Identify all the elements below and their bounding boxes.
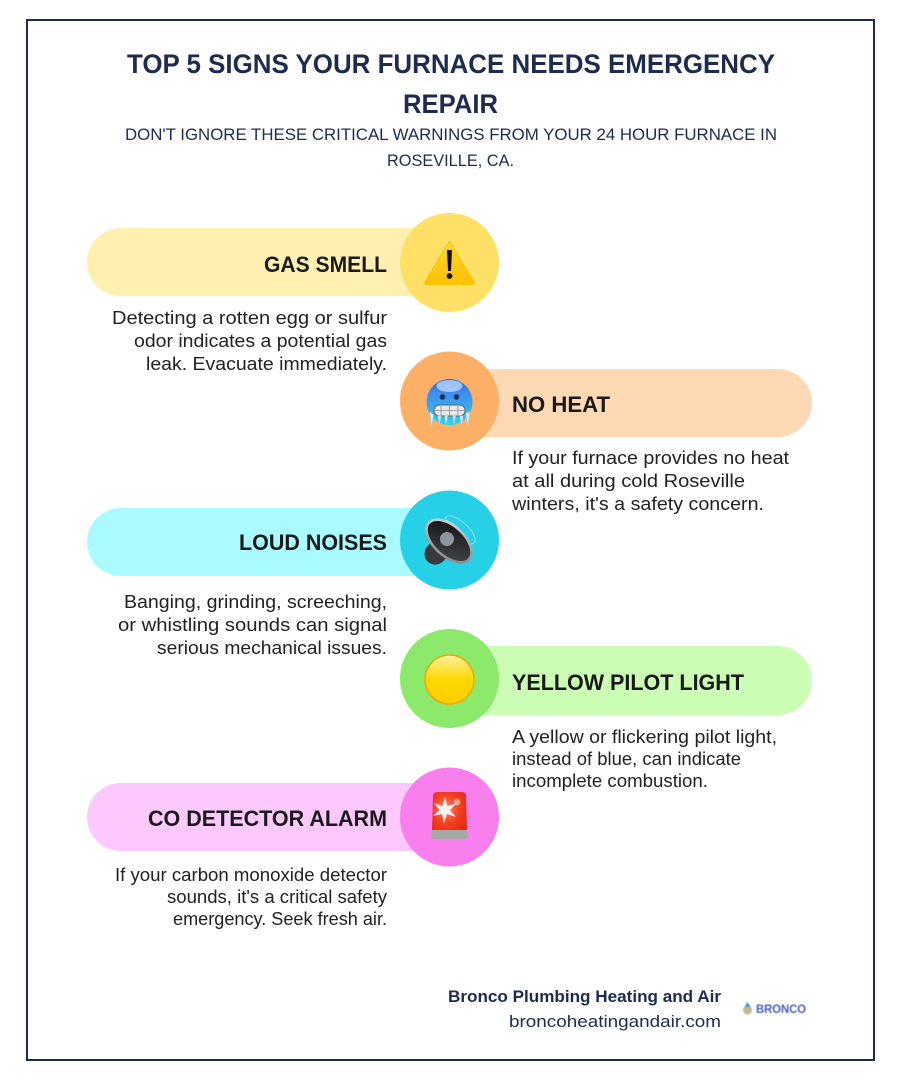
co detector alarm description: If your carbon monoxide detector [115,865,387,885]
gas smell description: odor indicates a potential gas [134,331,387,351]
subtitle [125,125,777,170]
yellow pilot light heading: YELLOW PILOT LIGHT [512,670,745,695]
icon: warning triangle [425,241,474,284]
icon: speaker [419,511,479,570]
loud noises description: Banging, grinding, screeching, [124,592,387,612]
no heat pill [445,369,812,437]
gas smell description: Detecting a rotten egg or sulfur [112,308,387,328]
co detector alarm heading: CO DETECTOR ALARM [148,806,387,831]
panel: loud noises [87,490,499,658]
no heat circle [400,352,499,450]
icon: bronco logo: BRONCO [756,1002,806,1016]
yellow pilot light circle [400,629,499,728]
title: TOP 5 SIGNS YOUR FURNACE NEEDS EMERGENCY [127,49,775,79]
yellow pilot light description: incomplete combustion. [512,771,708,791]
no heat heading: NO HEAT [512,392,611,417]
footer website: broncoheatingandair.com [509,1012,721,1031]
loud noises circle [400,490,499,590]
title: REPAIR [403,89,498,119]
loud noises description [118,592,387,658]
co detector alarm circle [400,768,499,866]
icon: red siren [431,792,468,839]
panel: yellow pilot light [400,629,812,791]
panel: no heat [400,352,812,514]
no heat description: at all during cold Roseville [512,471,745,491]
footer company name: Bronco Plumbing Heating and Air [448,988,722,1006]
loud noises description: serious mechanical issues. [157,638,387,658]
yellow pilot light description: instead of blue, can indicate [512,749,741,769]
icon: freezing face [426,379,472,427]
co detector alarm description [115,865,387,929]
yellow pilot light description: A yellow or flickering pilot light, [512,727,777,747]
panel: gas smell [87,213,499,374]
gas smell pill [87,228,457,296]
no heat description: winters, it's a safety concern. [511,494,764,514]
icon: yellow circle [425,655,474,704]
panel: co detector alarm [87,768,499,929]
gas smell heading: GAS SMELL [264,252,387,277]
title [127,49,775,119]
loud noises pill [87,508,457,576]
co detector alarm description: sounds, it's a critical safety [167,887,387,907]
loud noises description: or whistling sounds can signal [118,615,387,635]
gas smell description [112,308,387,374]
gas smell circle [400,213,499,312]
co detector alarm description: emergency. Seek fresh air. [173,909,387,929]
loud noises heading: LOUD NOISES [239,530,387,555]
gas smell description: leak. Evacuate immediately. [146,354,387,374]
subtitle: DON'T IGNORE THESE CRITICAL WARNINGS FROM YOUR 24 HOUR FURNACE IN [125,125,777,144]
yellow pilot light pill [445,646,812,715]
co detector alarm pill [87,783,457,851]
no heat description [511,448,789,514]
no heat description: If your furnace provides no heat [512,448,789,468]
yellow pilot light description [512,727,777,791]
subtitle: ROSEVILLE, CA. [387,151,514,170]
